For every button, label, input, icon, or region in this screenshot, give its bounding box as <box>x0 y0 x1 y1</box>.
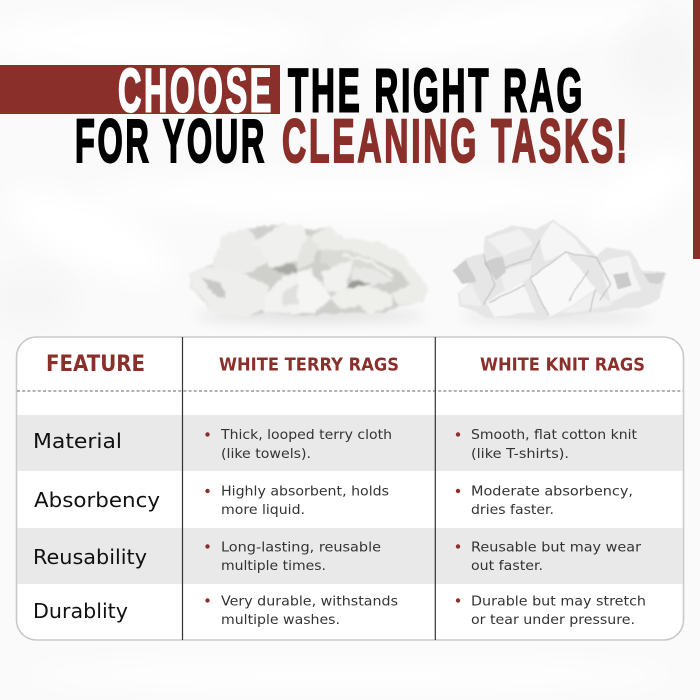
row: durability: Very durable, withstands <box>221 594 398 610</box>
title <box>75 56 630 175</box>
row: reusability: Long-lasting, reusable <box>221 540 381 556</box>
row: durability <box>33 594 646 628</box>
row: absorbency <box>34 484 633 518</box>
row: durability: or tear under pressure. <box>471 612 635 628</box>
header row <box>46 351 645 377</box>
row: reusability: multiple times. <box>221 558 326 574</box>
row: material: (like towels). <box>221 446 311 462</box>
row: absorbency: more liquid. <box>221 502 305 518</box>
zebra row: material <box>18 415 682 471</box>
accent bar: top right <box>693 0 700 259</box>
row: material: Material <box>33 429 122 453</box>
row: absorbency: dries faster. <box>471 502 554 518</box>
table panel <box>16 337 684 640</box>
title banner bar <box>0 65 280 114</box>
header row: FEATURE <box>46 351 145 377</box>
header row: WHITE TERRY RAGS <box>219 354 399 376</box>
row: reusability: out faster. <box>471 558 543 574</box>
row: durability: Durable but may stretch <box>471 594 646 610</box>
header row: WHITE KNIT RAGS <box>480 354 645 376</box>
row: material: Thick, looped terry cloth <box>220 427 392 443</box>
row: reusability: Reusable but may wear <box>471 540 641 556</box>
comparison table <box>16 337 684 640</box>
image: white terry rags pile <box>190 224 428 322</box>
row: material: Smooth, flat cotton knit <box>471 427 637 443</box>
row: reusability: Reusability <box>33 545 147 569</box>
row: durability: Durablity <box>33 599 128 623</box>
row: absorbency: Highly absorbent, holds <box>221 484 389 500</box>
row: material <box>33 427 637 462</box>
row: absorbency: Moderate absorbency, <box>471 484 633 500</box>
row: reusability <box>33 540 641 574</box>
row: absorbency: Absorbency <box>34 488 160 512</box>
row: durability: multiple washes. <box>221 612 340 628</box>
row: material: (like T-shirts). <box>471 446 569 462</box>
zebra row: reusability <box>18 528 682 584</box>
title: FOR YOUR <box>75 107 267 175</box>
title: CHOOSE <box>118 56 274 124</box>
image: white knit rags pile <box>453 220 667 322</box>
